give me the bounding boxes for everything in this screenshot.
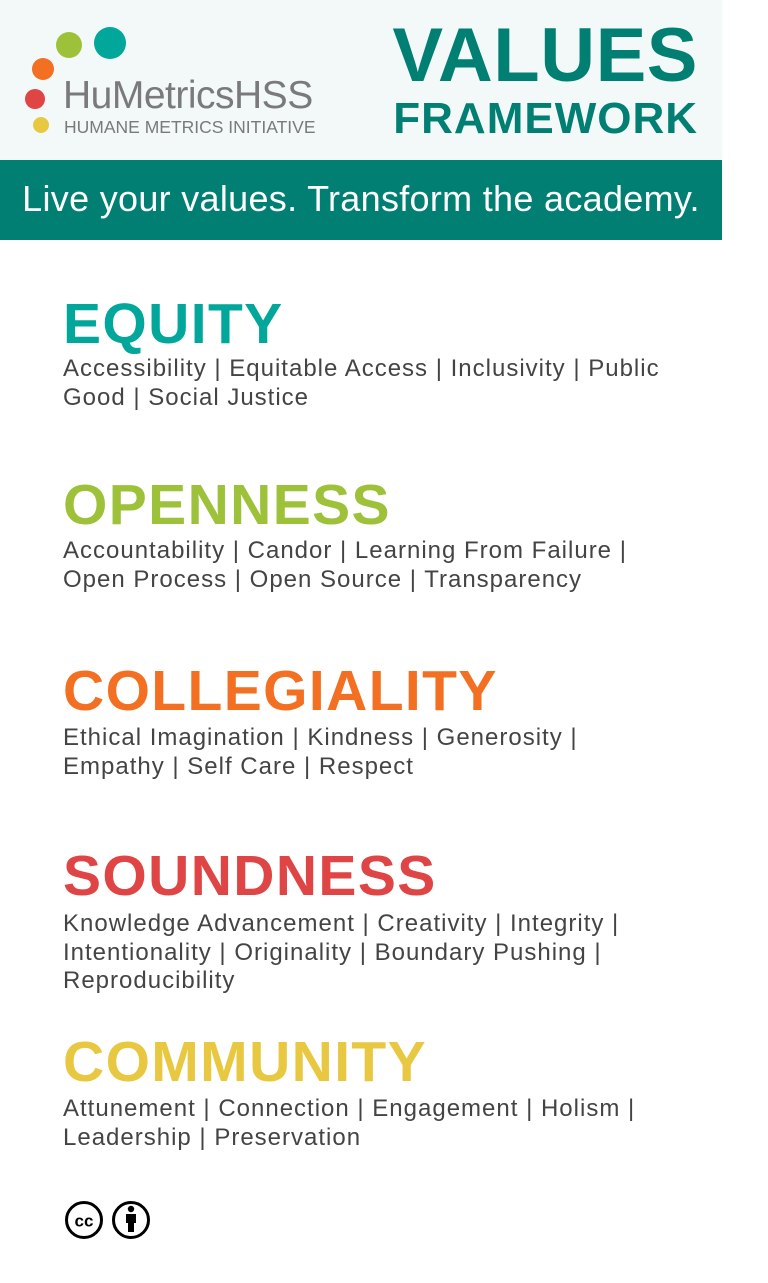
title — [392, 13, 698, 143]
logo: HuMetricsHSS — [63, 74, 313, 117]
section: soundness: Reproducibility — [63, 967, 235, 994]
section: equity: Good | Social Justice — [63, 384, 309, 410]
section: soundness — [63, 844, 619, 994]
section: openness: Accountability | Candor | Learning From Failure | — [63, 537, 627, 564]
section: openness: OPENNESS — [63, 473, 391, 537]
icon: cc license — [65, 1201, 150, 1239]
section: collegiality — [63, 659, 578, 780]
logo: HUMANE METRICS INITIATIVE — [64, 117, 316, 137]
header panel — [0, 0, 722, 160]
section: community: Attunement | Connection | Engagement | Holism | — [63, 1095, 635, 1122]
title: FRAMEWORK — [393, 94, 698, 143]
section: collegiality: Empathy | Self Care | Respect — [63, 752, 414, 780]
section: collegiality: COLLEGIALITY — [63, 659, 498, 723]
section: soundness: Intentionality | Originality | Boundary Pushing | — [63, 938, 602, 966]
section: equity: EQUITY — [63, 292, 284, 356]
title: VALUES — [392, 13, 698, 98]
section: equity — [63, 292, 660, 410]
section: community: Leadership | Preservation — [63, 1124, 361, 1150]
logo — [25, 27, 316, 137]
section: equity: Accessibility | Equitable Access | Inclusivity | Public — [63, 355, 660, 382]
section: collegiality: Ethical Imagination | Kindness | Generosity | — [63, 724, 578, 751]
icon: cc license: cc — [75, 1212, 93, 1230]
tagline band: Live your values. Transform the academy. — [22, 178, 700, 219]
section: community: COMMUNITY — [63, 1030, 427, 1094]
tagline band — [0, 160, 722, 240]
section: soundness: SOUNDNESS — [63, 844, 437, 908]
section: openness — [63, 473, 627, 592]
section: community — [63, 1030, 635, 1150]
section: openness: Open Process | Open Source | Transparency — [63, 566, 582, 592]
section: soundness: Knowledge Advancement | Creativity | Integrity | — [63, 910, 619, 937]
